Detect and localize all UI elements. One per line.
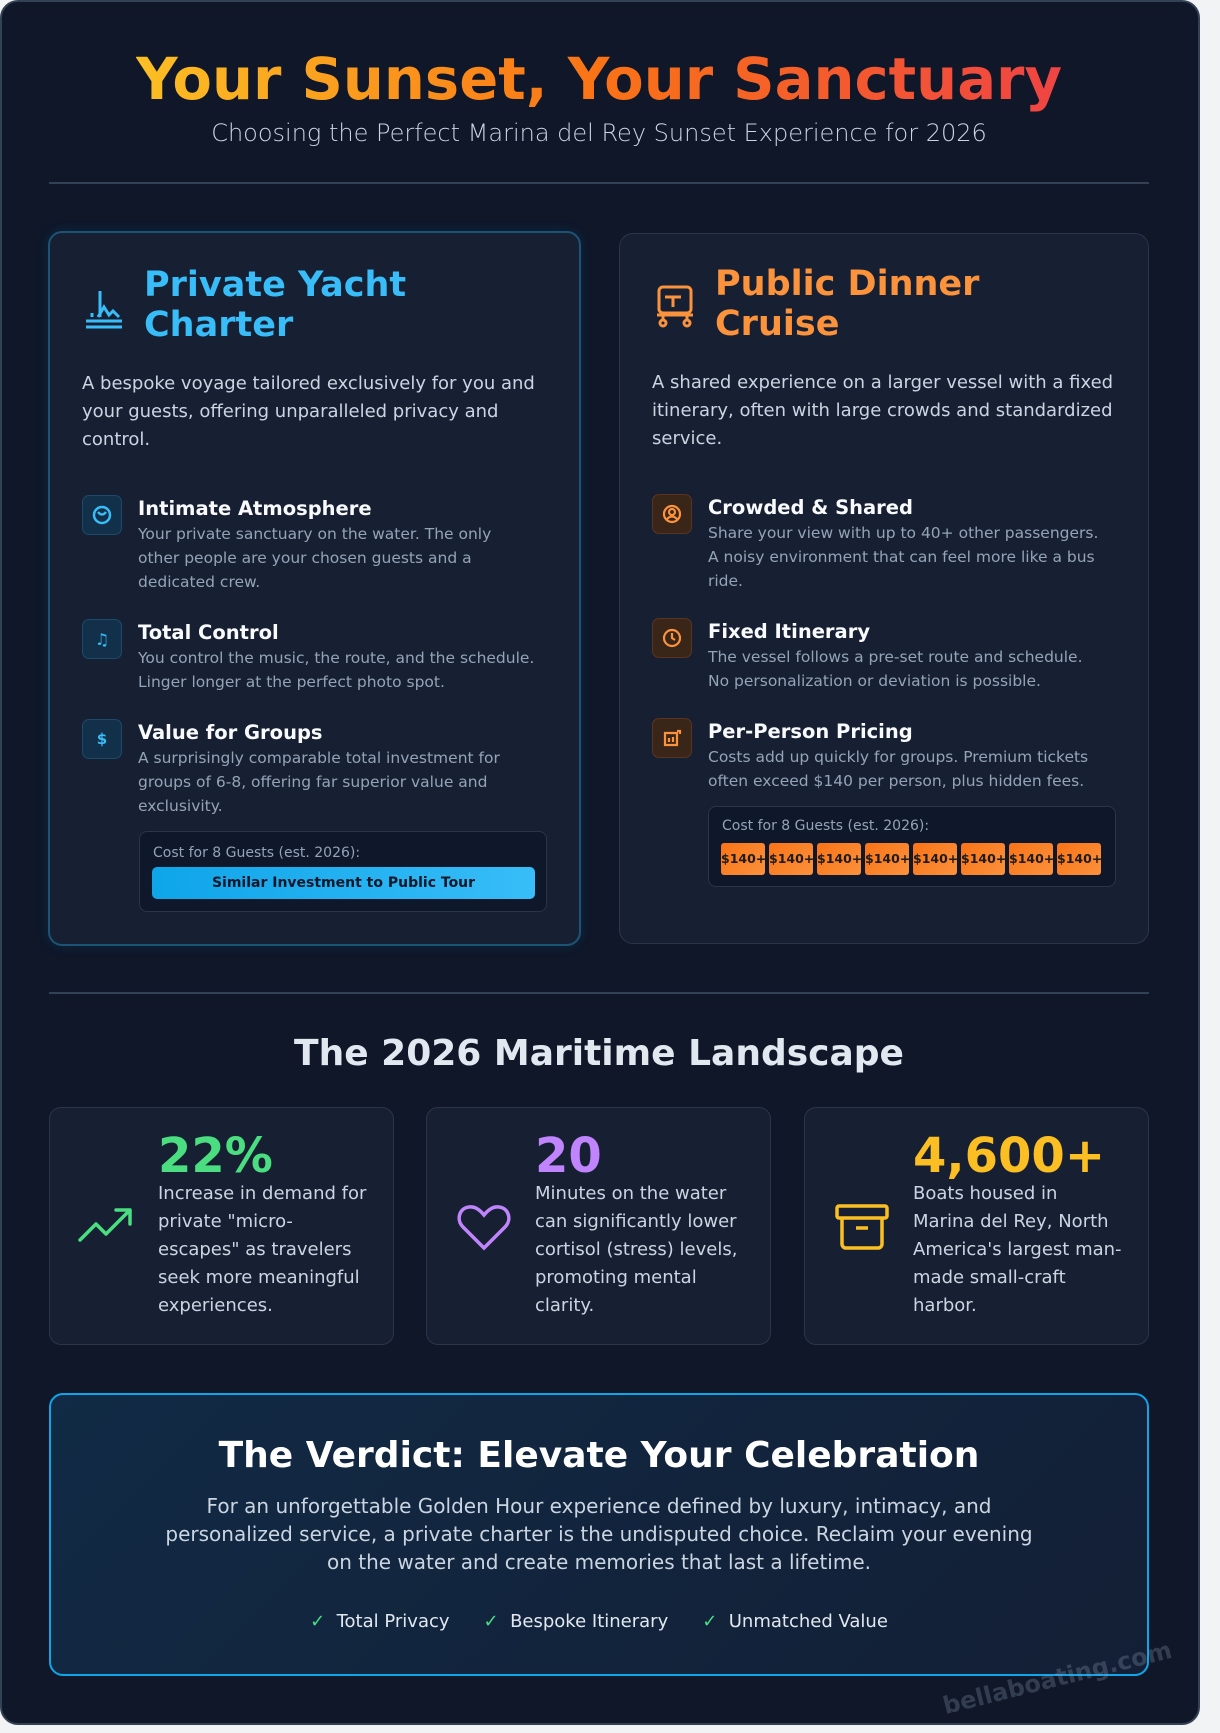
- stat: 20: Minutes on the water can significantly lower cortisol (stress) levels, promoting mental clarity.: [535, 1183, 737, 1316]
- feature: total control: Total Control: [138, 621, 279, 644]
- feature: value for groups: $: [97, 730, 107, 748]
- feature: per-person pricing: Costs add up quickly for groups. Premium tickets often exceed $140 per person, plus hidden fees.: [708, 748, 1088, 790]
- feature: fixed itinerary: Fixed Itinerary: [708, 620, 870, 643]
- feature: crowded: Share your view with up to 40+ other passengers. A noisy environment that can feel more like a bus ride.: [708, 524, 1098, 590]
- stat: 4,600+: [804, 1107, 1149, 1345]
- feature: total control: You control the music, the route, and the schedule. Linger longer at the perfect photo spot.: [138, 649, 534, 691]
- feature: total control: [82, 619, 534, 691]
- icon: trend: [78, 1208, 132, 1242]
- cost box: public tiles: $140+: [913, 851, 958, 866]
- icon: bus: [657, 286, 693, 328]
- feature: intimate atmosphere: [82, 495, 491, 591]
- feature: crowded: [652, 494, 1098, 590]
- stat: 20: 20: [535, 1128, 602, 1184]
- subtitle: Choosing the Perfect Marina del Rey Sunset Experience for 2026: [211, 119, 987, 147]
- watermark: bellaboating.com: [940, 1636, 1175, 1720]
- heading: [144, 265, 406, 345]
- stat: 22%: Increase in demand for private "micro-escapes" as travelers seek more meaningful experiences.: [158, 1183, 366, 1316]
- feature: intimate atmosphere: Your private sanctuary on the water. The only other people are your chosen guests and a dedicated crew.: [138, 525, 491, 591]
- panel: public dinner cruise: [619, 233, 1149, 944]
- feature: per-person pricing: [652, 718, 1088, 790]
- cost box: public tiles: $140+: [817, 851, 862, 866]
- stat: 4,600+: Boats housed in Marina del Rey, North America's largest man-made small-craft harbor.: [913, 1183, 1122, 1316]
- cost box: public tiles: $140+: [1009, 851, 1054, 866]
- bar: similar investment: Similar Investment to Public Tour: [212, 875, 475, 891]
- cost box: public tiles: $140+: [721, 851, 766, 866]
- stat: 22%: 22%: [158, 1128, 273, 1184]
- feature: value for groups: Value for Groups: [138, 721, 323, 744]
- feature: intimate atmosphere: Intimate Atmosphere: [138, 497, 372, 520]
- cost box: public tiles: Cost for 8 Guests (est. 2026):: [722, 818, 929, 834]
- icon: heart: [457, 1205, 511, 1250]
- stat: 22%: [49, 1107, 394, 1345]
- verdict heading: The Verdict: Elevate Your Celebration: [219, 1435, 979, 1476]
- panel: private yacht charter: [48, 231, 581, 946]
- description: A bespoke voyage tailored exclusively for you and your guests, offering unparalleled privacy and control.: [82, 373, 535, 450]
- feature: fixed itinerary: [652, 618, 1082, 690]
- feature: crowded: Crowded & Shared: [708, 496, 913, 519]
- cost box: public tiles: $140+: [769, 851, 814, 866]
- heading: [715, 264, 980, 344]
- icon: box: [835, 1204, 889, 1250]
- verdict panel: [49, 1393, 1149, 1676]
- cost box: public tiles: [708, 806, 1116, 887]
- feature: per-person pricing: Per-Person Pricing: [708, 720, 913, 743]
- stat: 4,600+: 4,600+: [913, 1128, 1105, 1184]
- heading: Cruise: [715, 304, 839, 344]
- cost box: private: Cost for 8 Guests (est. 2026):: [153, 845, 360, 861]
- feature: fixed itinerary: The vessel follows a pre-set route and schedule. No personalization or deviation is possible.: [708, 648, 1082, 690]
- feature: value for groups: [82, 719, 500, 815]
- cost box: private: [139, 831, 547, 912]
- verdict text: For an unforgettable Golden Hour experience defined by luxury, intimacy, and personalized service, a private charter is the undisputed choice. Reclaim your evening on the water and create memories that last a lifetime.: [165, 1494, 1033, 1574]
- cost box: public tiles: $140+: [865, 851, 910, 866]
- heading: Charter: [144, 305, 293, 345]
- icon: yacht: [86, 291, 122, 328]
- feature: total control: ♫: [95, 630, 109, 648]
- heading: Private Yacht: [144, 265, 406, 305]
- stat: 20: [426, 1107, 771, 1345]
- description: A shared experience on a larger vessel with a fixed itinerary, often with large crowds and standardized service.: [652, 372, 1113, 449]
- heading: Public Dinner: [715, 264, 979, 304]
- bar: similar investment: [152, 867, 535, 899]
- cost box: public tiles: $140+: [961, 851, 1006, 866]
- cost box: public tiles: $140+: [1057, 851, 1102, 866]
- feature: value for groups: A surprisingly comparable total investment for groups of 6-8, offering far superior value and exclusivity.: [138, 749, 500, 815]
- section heading: The 2026 Maritime Landscape: [294, 1033, 904, 1074]
- checklist: ✓ Total Privacy ✓ Bespoke Itinerary ✓ Unmatched Value: [310, 1611, 888, 1632]
- title: Your Sunset, Your Sanctuary: [136, 46, 1062, 113]
